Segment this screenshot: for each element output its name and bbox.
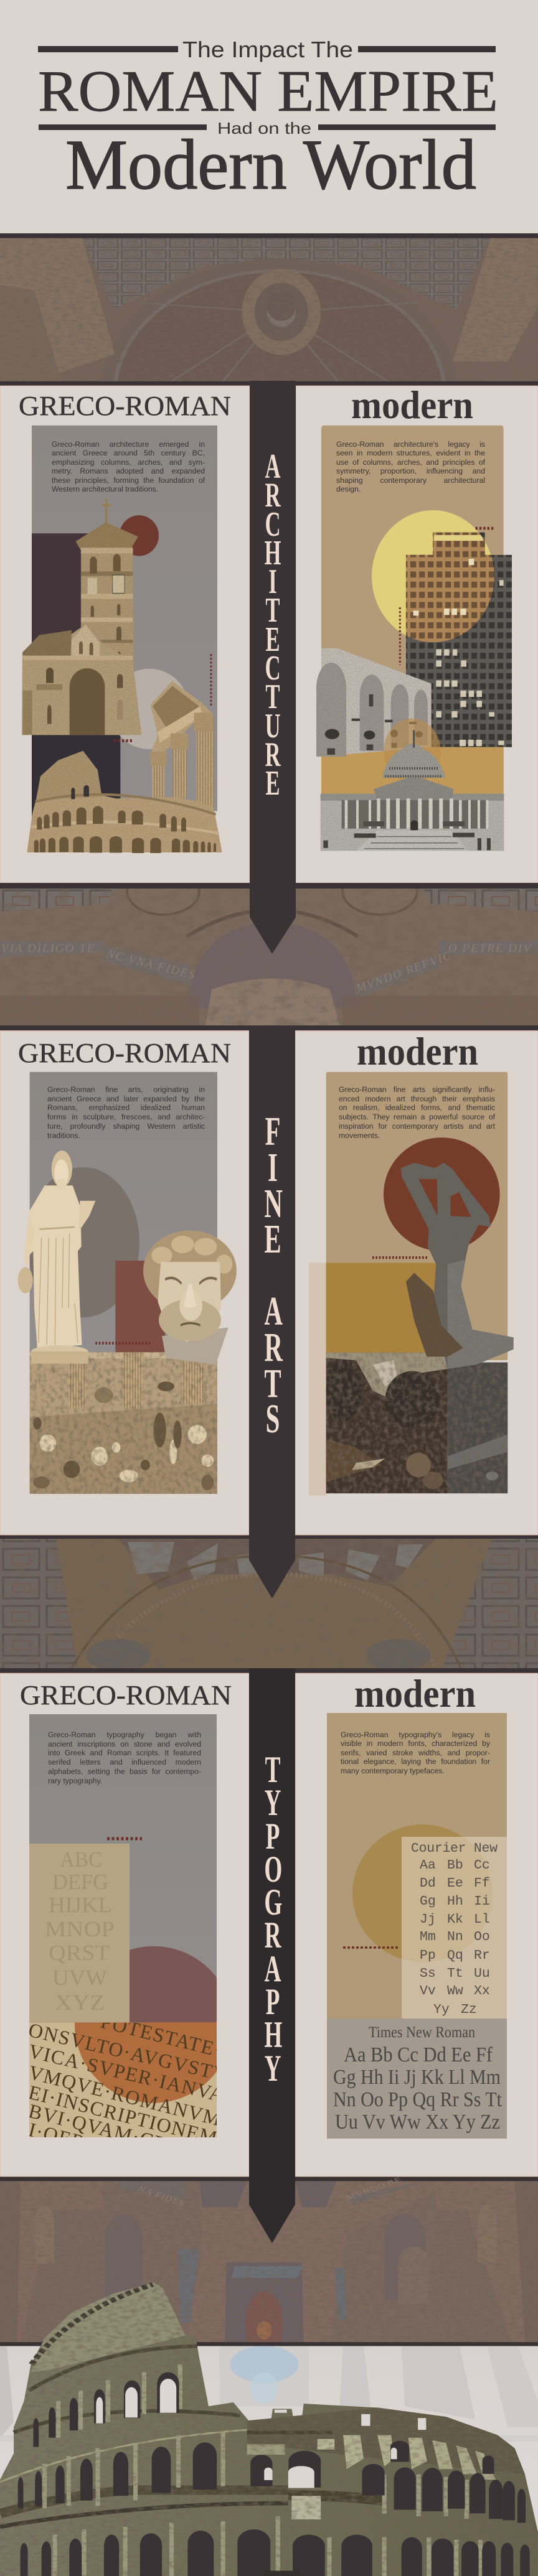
text: architecture modern: use of columns, arches, and principles of (336, 458, 485, 467)
stone alphabet tablet: DEFG (52, 1870, 108, 1894)
heading: greco-roman: GRECO-ROMAN (18, 1038, 231, 1068)
maroon circle (130, 1946, 217, 2022)
heading: greco-roman: GRECO-ROMAN (20, 1680, 232, 1710)
title line: Modern World: Modern World (65, 125, 476, 204)
band inscription: MVNDO REFVIC (354, 949, 454, 996)
courier new specimen (411, 1841, 498, 2017)
courier new specimen: Nn (447, 1930, 463, 1944)
heading: greco-roman: GRECO-ROMAN (19, 391, 231, 421)
courier new specimen: Hh (447, 1894, 463, 1909)
times new roman specimen: Aa Bb Cc Dd Ee Ff (344, 2043, 493, 2066)
text: typography greco-roman: rary typography. (48, 1776, 102, 1785)
text: fine arts modern: enced modern art through their emphasis (339, 1094, 495, 1103)
tan backdrop (327, 1713, 507, 2018)
band inscription: MVNDO RE (345, 2175, 404, 2203)
photo: sepia fresco (30, 1352, 217, 1494)
collage: ancient architecture (22, 426, 222, 853)
text: typography modern: tional elegance, laying the foundation for (341, 1757, 490, 1766)
title rule top left (38, 46, 178, 52)
text: architecture modern: Greco-Roman architecture's legacy is (336, 440, 485, 449)
gray backdrop (29, 1714, 217, 2023)
title line: Roman Empire: ROMAN EMPIRE (38, 59, 498, 124)
arrow: typography spine (249, 1668, 295, 2243)
tan backdrop (321, 426, 504, 795)
text: typography greco-roman: alphabets, setting the basis for contempo- (48, 1767, 201, 1776)
courier new specimen: Vv (420, 1984, 436, 1999)
text: typography modern (341, 1730, 490, 1775)
text: typography greco-roman: serifed letters and influenced modern (48, 1758, 201, 1766)
vertical label: typography: TYPOGRAPHY (264, 1749, 282, 2089)
text: architecture modern: design. (336, 485, 361, 493)
ochre circle (352, 1824, 493, 1962)
text: fine arts greco-roman: ancient Greece and later expanded by the (47, 1094, 205, 1103)
courier new specimen: Aa (420, 1858, 436, 1873)
courier new specimen: Yy (433, 2002, 450, 2017)
panel: architecture modern (296, 383, 538, 883)
photo: landscape painting (326, 1353, 448, 1493)
colosseum photo (0, 2282, 538, 2576)
dotted rule (107, 1837, 142, 1841)
text: architecture modern (336, 440, 485, 493)
band inscription: O PETRE DIV (448, 942, 532, 955)
panel: typography greco-roman (0, 1673, 249, 2177)
red circle (120, 515, 159, 556)
pale circle (110, 669, 189, 749)
carved inscription photo: I·OER·FRA (26, 2118, 136, 2165)
title rule lower left (39, 124, 207, 130)
carved inscription photo: VICA·SVPER·IANVAM·N (26, 2040, 267, 2116)
stone alphabet tablet: HIJKL (49, 1893, 112, 1917)
dim circle (27, 1167, 139, 1317)
text: fine arts greco-roman: ture, profoundly shaping Western artistic (47, 1122, 205, 1131)
stone alphabet tablet (29, 1844, 130, 2023)
stone alphabet tablet: QRST (49, 1941, 110, 1965)
dotted rule vertical (208, 654, 214, 706)
courier new specimen: Oo (474, 1930, 490, 1944)
courier new specimen: Zz (461, 2002, 477, 2017)
text: typography greco-roman: ancient inscriptions on stone and evolved (48, 1740, 201, 1748)
ochre block (326, 1263, 448, 1355)
pale sky with faded basilica (0, 2346, 538, 2442)
text: fine arts modern: inspiration for contemporary artists and art (339, 1122, 495, 1131)
stone alphabet tablet: MNOP (45, 1917, 115, 1941)
text: fine arts greco-roman: Romans, emphasized idealized human (47, 1103, 205, 1112)
courier new specimen: Ee (447, 1876, 463, 1891)
courier new specimen: Uu (474, 1966, 490, 1981)
text: architecture greco-roman (52, 440, 205, 493)
courier new specimen: Xx (474, 1984, 490, 1999)
text: architecture greco-roman: metry. Romans adopted and expanded (52, 467, 205, 475)
carved inscription photo (29, 2022, 217, 2137)
maroon block (115, 1261, 165, 1352)
stone alphabet tablet: UVW (52, 1966, 107, 1990)
collage: modern architecture (316, 426, 512, 851)
text: typography greco-roman: into Greek and Roman scripts. It featured (48, 1748, 201, 1757)
courier new specimen: Kk (447, 1912, 463, 1927)
image band: dome ceiling (0, 233, 538, 386)
title (38, 37, 498, 204)
courier new specimen: Ii (474, 1894, 490, 1909)
times new roman specimen: Nn Oo Pp Qq Rr Ss Tt (333, 2088, 502, 2111)
courier new specimen: Ss (420, 1966, 436, 1981)
photo: temple columns (149, 681, 214, 808)
courier new specimen: Pp (420, 1948, 436, 1963)
text: typography modern: visible in modern fonts, characterized by (341, 1739, 490, 1748)
panel: typography modern (295, 1671, 538, 2177)
courier new specimen: Gg (420, 1894, 436, 1909)
title line: The Impact The: The Impact The (182, 37, 353, 62)
image band: ceiling with inscriptions (0, 867, 538, 1030)
title line: Had on the: Had on the (217, 119, 311, 138)
red circle (384, 1137, 500, 1251)
heading: modern: modern (354, 1671, 476, 1715)
text: fine arts greco-roman: Greco-Roman fine arts, originating in (47, 1085, 205, 1094)
courier new specimen: Ff (474, 1876, 490, 1891)
dotted rule horizontal (476, 526, 494, 531)
photo: church tower (22, 498, 141, 735)
text: architecture greco-roman: Western architectural traditions. (52, 485, 158, 493)
text: architecture modern: shaping contemporary architectural (336, 476, 485, 485)
vertical label: architecture: ARCHITECTURE (264, 447, 281, 803)
courier new specimen: Cc (474, 1858, 490, 1873)
carved inscription photo: EI·INSCRIPTIONEM·P (26, 2081, 239, 2154)
title rule lower right (318, 124, 496, 130)
photo: capitol building (321, 730, 504, 851)
courier new specimen: Mm (420, 1930, 436, 1944)
panel: architecture greco-roman (0, 386, 250, 883)
panel: fine arts greco-roman (0, 1031, 249, 1535)
vertical label: fine arts: ARTS (264, 1289, 283, 1442)
dark block lower (32, 735, 120, 830)
carved inscription photo: POTESTATE·EX·STIN (98, 2010, 306, 2082)
text: fine arts modern (339, 1085, 495, 1140)
image band: coffered arch (0, 1534, 538, 1673)
title rule top right (358, 46, 496, 52)
collage: modern art (309, 1072, 514, 1496)
dotted rule (95, 1342, 151, 1345)
pale specimen card (402, 1837, 507, 2018)
text: fine arts greco-roman: traditions. (47, 1131, 80, 1140)
arrow: architecture spine (250, 381, 296, 954)
dotted rule (343, 1946, 399, 1949)
text: architecture modern: seen in modern structures, evident in the (336, 449, 485, 457)
heading: modern: modern (357, 1029, 478, 1073)
stone alphabet tablet: ABC (60, 1847, 102, 1872)
text: typography greco-roman: Greco-Roman typography began with (48, 1730, 201, 1739)
heading: modern: modern (351, 383, 473, 427)
text: architecture modern: symmetry, proportion, influencing and (336, 467, 485, 475)
photo: white arcade (316, 648, 432, 757)
dark block upper (32, 533, 88, 673)
courier new specimen: Jj (420, 1912, 436, 1927)
courier new specimen: Ww (447, 1984, 463, 1999)
times new roman specimen: Times New Roman (369, 2024, 475, 2041)
yellow sun (372, 510, 494, 642)
photo: tower block (406, 533, 512, 747)
text: fine arts greco-roman: forms in sculpture, frescoes, and architec- (47, 1113, 205, 1121)
image: sky and colosseum (0, 2282, 538, 2576)
pale translucent block (309, 1263, 326, 1496)
gray backdrop (30, 1072, 217, 1353)
photo: marble statue (18, 1150, 95, 1364)
gray backdrop (32, 426, 217, 811)
courier new specimen: Bb (447, 1858, 463, 1873)
courier new specimen: Qq (447, 1948, 463, 1963)
photo: seated modernist sculpture (401, 1163, 514, 1369)
carved inscription photo: ONSVLTO·AVGVSTVS·A (26, 2018, 264, 2094)
vertical label: fine arts (264, 1109, 283, 1442)
sky seen through arches (96, 2379, 426, 2488)
dotted rule (372, 1256, 428, 1259)
courier new specimen: Tt (447, 1966, 463, 1981)
dotted rule horizontal (114, 738, 133, 744)
text: typography modern: many contemporary typefaces. (341, 1766, 445, 1775)
text: fine arts greco-roman (47, 1085, 205, 1140)
image band: basilica interior (0, 2175, 538, 2359)
times new roman specimen: Gg Hh Ii Jj Kk Ll Mm (333, 2066, 501, 2089)
courier new specimen: Rr (474, 1948, 490, 1963)
text: architecture greco-roman: ancient Greece around 5th century BC, (52, 449, 205, 457)
text: typography greco-roman (48, 1730, 201, 1785)
courier new specimen: Courier New (411, 1841, 498, 1856)
band inscription: NA FIDES (136, 2185, 187, 2208)
band inscription: VIA DILIGO TE (1, 942, 95, 955)
colosseum openings (18, 2373, 530, 2576)
text: typography modern: serifs, varied stroke widths, and propor- (341, 1748, 490, 1757)
tan backdrop (326, 1072, 507, 1360)
carved inscription photo: BVI·QVAM·CETERI (26, 2099, 216, 2167)
stone alphabet tablet: XYZ (55, 1990, 105, 2015)
collage: classical sculpture (18, 1072, 237, 1494)
text: fine arts modern: on realism, idealized forms, and thematic (339, 1103, 495, 1112)
times new roman specimen: Uu Vv Ww Xx Yy Zz (335, 2111, 500, 2134)
vertical label: fine arts: FINE (264, 1109, 283, 1262)
courier new specimen: Ll (474, 1912, 490, 1927)
courier new specimen: Dd (420, 1876, 436, 1891)
arrow: fine arts spine (249, 1025, 295, 1598)
text: fine arts modern: movements. (339, 1131, 380, 1140)
text: typography modern: Greco-Roman typography's legacy is (341, 1730, 490, 1739)
text: fine arts modern: Greco-Roman fine arts significantly influ- (339, 1085, 495, 1094)
photo: marble bust (143, 1231, 237, 1365)
dark translucent block (448, 1363, 507, 1493)
band inscription: NC VNA FIDES (105, 947, 197, 982)
photo: colosseum ruin (27, 751, 222, 853)
ochre band (321, 747, 504, 795)
carved inscription photo: VMQVE·ROMANVM·DAR (26, 2061, 275, 2143)
text: architecture greco-roman: emphasizing columns, arches, and sym- (52, 458, 205, 467)
text: architecture greco-roman: Greco-Roman architecture emerged in (52, 440, 205, 449)
dotted rule vertical (397, 607, 403, 665)
amber circle (384, 719, 441, 783)
times new roman specimen (327, 2018, 507, 2139)
band inscription (1, 942, 532, 996)
text: fine arts modern: subjects. They remain a powerful source of (339, 1113, 495, 1121)
band inscription (136, 2175, 404, 2208)
panel: fine arts modern (295, 1029, 538, 1535)
text: architecture greco-roman: these principles, forming the foundation of (52, 476, 205, 485)
